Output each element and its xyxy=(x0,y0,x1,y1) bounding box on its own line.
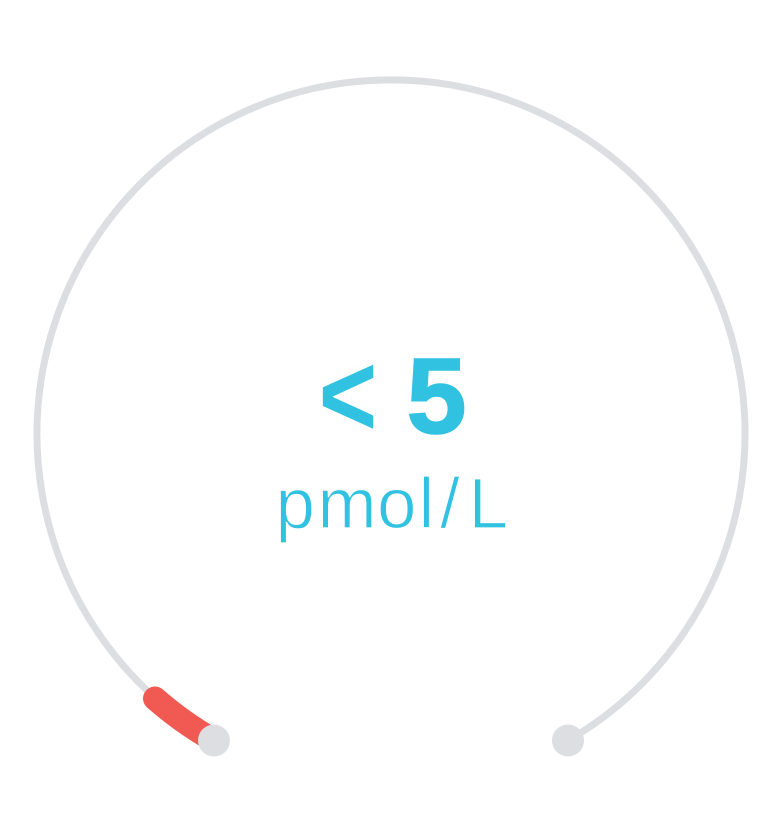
right end dot xyxy=(552,724,584,756)
value number: 5 xyxy=(406,335,467,456)
red value arc xyxy=(155,698,214,740)
left end dot xyxy=(198,724,230,756)
gauge track arc xyxy=(37,80,745,740)
less-than sign: < xyxy=(319,329,377,462)
unit text: pmol/L xyxy=(276,465,508,544)
